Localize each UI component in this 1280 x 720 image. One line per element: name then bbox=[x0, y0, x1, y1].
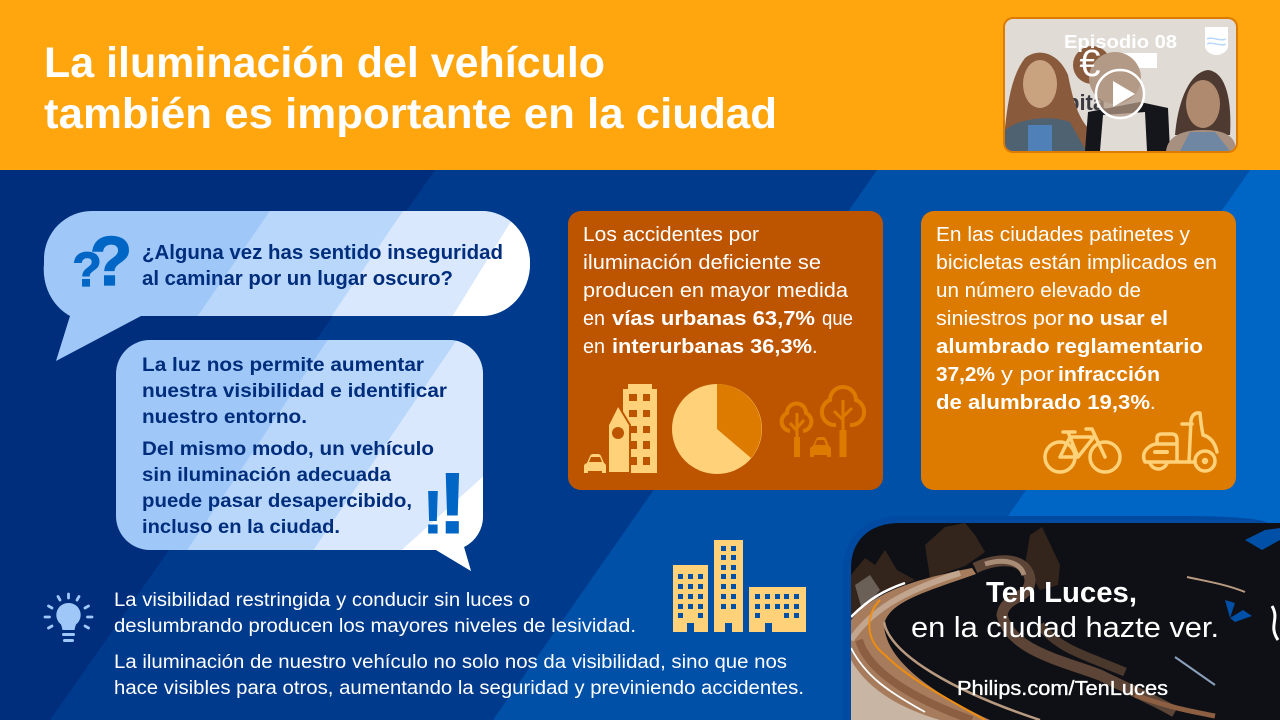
panel: scooters and bicycles bbox=[921, 211, 1236, 490]
urban accidents text: vías urbanas 63,7% bbox=[612, 308, 815, 330]
icon: motor scooter bbox=[1144, 413, 1217, 471]
answer text: nuestra visibilidad e identificar bbox=[142, 380, 447, 402]
answer text: Del mismo modo, un vehículo bbox=[142, 438, 434, 460]
answer text: incluso en la ciudad. bbox=[142, 516, 340, 538]
answer text: La luz nos permite aumentar bbox=[142, 354, 424, 376]
title: también es importante en la ciudad bbox=[44, 90, 777, 138]
question text bbox=[142, 242, 503, 290]
header band bbox=[0, 0, 1280, 170]
pie chart: 63.7 / 36.3 bbox=[672, 384, 762, 474]
icon: exclamation marks: ! bbox=[438, 456, 467, 552]
icon: light bulb bbox=[45, 594, 92, 642]
scooters text: no usar el bbox=[1068, 308, 1168, 330]
icon: bicycle bbox=[1045, 429, 1120, 472]
urban accidents text: iluminación deficiente se bbox=[583, 252, 821, 274]
scooters text: de alumbrado 19,3% bbox=[936, 392, 1150, 414]
question text: al caminar por un lugar oscuro? bbox=[142, 268, 453, 290]
urban accidents text: en bbox=[583, 336, 605, 358]
photo: night road with light trails bbox=[851, 523, 1280, 720]
photo text: en la ciudad hazte ver. bbox=[911, 612, 1219, 644]
scooters text: 37,2% bbox=[936, 364, 995, 386]
urban accidents text bbox=[583, 224, 853, 358]
panel: urban accidents bbox=[568, 211, 883, 490]
urban accidents text: . bbox=[812, 336, 818, 358]
answer text bbox=[142, 354, 447, 538]
title: La iluminación del vehículo bbox=[44, 39, 605, 87]
scooters text: alumbrado reglamentario bbox=[936, 336, 1203, 358]
scooters text: siniestros por bbox=[936, 308, 1064, 330]
body text: visibility: La visibilidad restringida y conducir sin luces o bbox=[114, 590, 530, 611]
speech bubble: question bbox=[40, 205, 540, 365]
icon: question marks: ? bbox=[90, 222, 132, 300]
urban accidents text: interurbanas 36,3% bbox=[612, 336, 812, 358]
video thumbnail: pita bbox=[1066, 90, 1106, 115]
body text: visibility: deslumbrando producen los mayores niveles de lesividad. bbox=[114, 616, 636, 637]
question text: ¿Alguna vez has sentido inseguridad bbox=[142, 242, 503, 264]
icon: city skyline bbox=[673, 540, 806, 632]
icon: exclamation marks: ! bbox=[423, 479, 443, 546]
body text: visibility bbox=[114, 590, 804, 699]
urban accidents text: que bbox=[822, 308, 853, 330]
title bbox=[44, 39, 777, 138]
video thumbnail: Episodio 08 bbox=[1064, 32, 1177, 52]
background diagonal bands bbox=[0, 170, 1280, 720]
icon: question marks: ? bbox=[72, 244, 102, 297]
answer text: sin iluminación adecuada bbox=[142, 464, 391, 486]
body text: visibility: La iluminación de nuestro vehículo no solo nos da visibilidad, sino que nos bbox=[114, 652, 787, 673]
icon: trees and car bbox=[782, 387, 864, 457]
photo text: Philips.com/TenLuces bbox=[957, 678, 1168, 700]
photo halo bbox=[843, 516, 1268, 720]
photo text bbox=[911, 577, 1219, 700]
scooters text: infracción bbox=[1058, 364, 1160, 386]
scooters text: . bbox=[1150, 392, 1156, 414]
urban accidents text: en bbox=[583, 308, 605, 330]
scooters text: un número elevado de bbox=[936, 280, 1141, 302]
icon: exclamation marks bbox=[423, 456, 467, 552]
scooters text: y por bbox=[1001, 364, 1054, 386]
body text: visibility: hace visibles para otros, aumentando la seguridad y previniendo accidentes. bbox=[114, 678, 804, 699]
photo text: Ten Luces, bbox=[986, 577, 1137, 609]
scooters text bbox=[936, 224, 1217, 414]
icon: city buildings and car bbox=[584, 384, 657, 473]
urban accidents text: producen en mayor medida bbox=[583, 280, 849, 302]
video thumbnail bbox=[1003, 17, 1238, 153]
answer text: puede pasar desapercibido, bbox=[142, 490, 412, 512]
scooters text: bicicletas están implicados en bbox=[936, 252, 1217, 274]
speech bubble: answer bbox=[110, 335, 490, 575]
video thumbnail: € bbox=[1079, 43, 1101, 85]
answer text: nuestro entorno. bbox=[142, 406, 307, 428]
scooters text: En las ciudades patinetes y bbox=[936, 224, 1190, 246]
urban accidents text: Los accidentes por bbox=[583, 224, 759, 246]
